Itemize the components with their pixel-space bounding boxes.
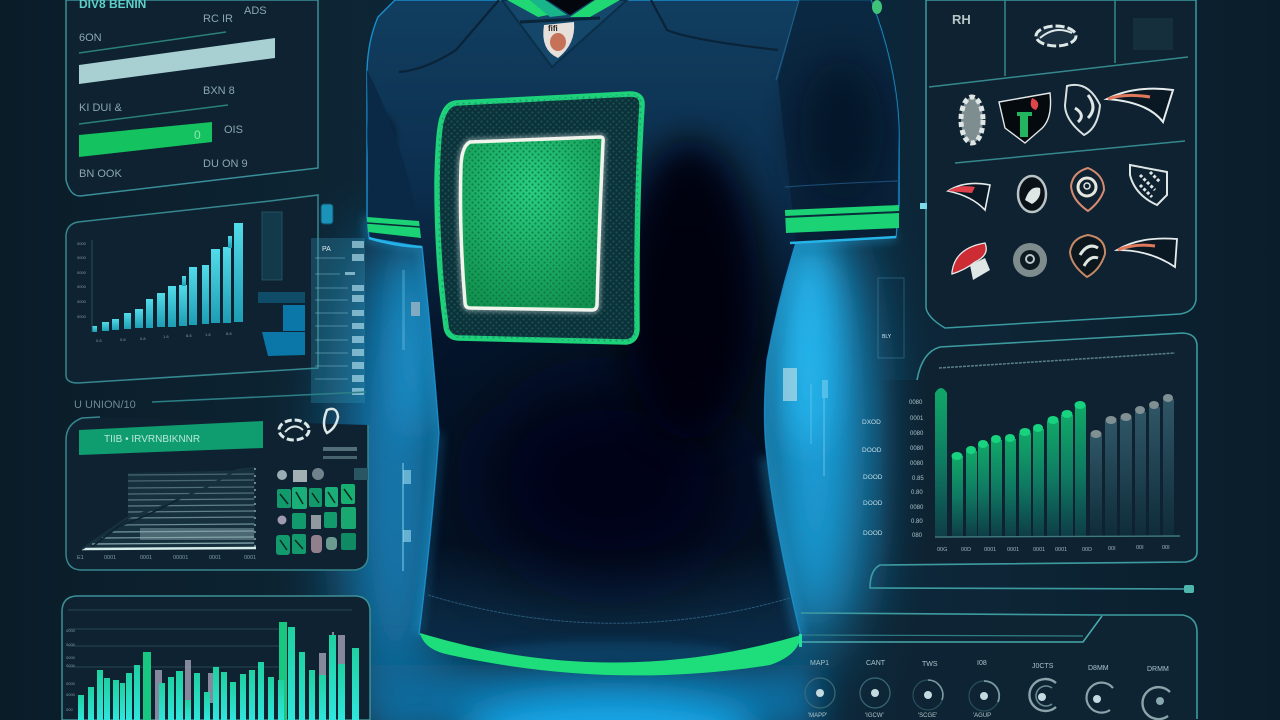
- bar labels: ADS: [244, 5, 267, 17]
- gauge labels: [810, 660, 1169, 673]
- x axis labels: 00I: [1108, 546, 1116, 552]
- chart axis labels: [77, 241, 232, 343]
- gauge labels: TWS: [922, 661, 938, 668]
- chart axis labels: 1.8: [163, 334, 169, 339]
- chart axis labels: 0000: [77, 270, 87, 275]
- left sleeve cuff: [367, 217, 422, 247]
- chart axis labels: 8.8: [226, 331, 232, 336]
- chart axis labels: 0000: [77, 299, 87, 304]
- outer labels: DOOD: [863, 500, 883, 507]
- gauge captions: 'IGCW': [865, 713, 884, 719]
- side holographic elements: BLY: [882, 334, 892, 340]
- data table: [311, 238, 365, 403]
- outer labels: DOOD: [863, 474, 883, 481]
- chart axis labels: 8.8: [186, 333, 192, 338]
- chart axis labels: 0000: [77, 314, 87, 319]
- x axis labels: 0001: [1007, 547, 1019, 553]
- y axis labels: 0001: [910, 416, 924, 422]
- y axis labels: 0080: [910, 431, 924, 437]
- hem stripe: [420, 633, 801, 675]
- x axis labels: 00D: [1082, 547, 1092, 553]
- right sleeve cuff: [785, 205, 899, 243]
- line chart axis labels: [77, 555, 256, 561]
- x axis labels: 0001: [1033, 547, 1045, 553]
- gauge labels: D8MM: [1088, 665, 1109, 672]
- outer labels: [862, 419, 883, 537]
- axis labels: 0000: [66, 692, 76, 697]
- jersey shading: [480, 380, 740, 580]
- bar labels: 6ON: [79, 32, 102, 44]
- bar labels: BXN 8: [203, 85, 235, 97]
- chart axis labels: 0.8: [120, 337, 126, 342]
- hem stitching: [428, 595, 790, 623]
- axis labels: 0000: [66, 642, 76, 647]
- panel: bottom-left multi-series bars: [62, 596, 370, 720]
- side holographic elements: [402, 270, 904, 571]
- chest patch: [437, 94, 642, 342]
- gauge centres: [816, 689, 1164, 705]
- x axis labels: 00D: [961, 547, 971, 553]
- chart axis labels: 0000: [77, 284, 87, 289]
- gauge rings: [805, 678, 1170, 719]
- bar labels: KI DUI &: [79, 102, 122, 114]
- line chart axis labels: 00001: [173, 555, 188, 561]
- line chart axis labels: 0001: [209, 555, 221, 561]
- chart title rule: [939, 353, 1175, 368]
- gauge captions: 'MAPP': [808, 713, 827, 719]
- inner glow: [460, 137, 603, 310]
- column caps: [952, 401, 1086, 460]
- axis labels: 0000: [66, 655, 76, 660]
- toggle icon: [321, 204, 333, 224]
- gauge labels: MAP1: [810, 660, 829, 667]
- axis labels: 0000: [66, 628, 76, 633]
- logo row 1: RH: [952, 12, 971, 27]
- green series: [143, 622, 287, 720]
- green columns: [935, 388, 1086, 536]
- icon grid: [276, 468, 368, 555]
- axis labels: [66, 628, 76, 712]
- slider knob: [1184, 585, 1194, 593]
- banner text: TIIB • IRVRNBIKNNR: [104, 434, 200, 445]
- y axis labels: 080: [912, 533, 923, 539]
- outer labels: DOOD: [862, 447, 882, 454]
- axis labels: 0000: [66, 663, 76, 668]
- bar labels: BN OOK: [79, 168, 122, 180]
- chart axis labels: 0.8: [96, 338, 102, 343]
- blue blocks: [258, 292, 305, 356]
- side mini table: [262, 212, 282, 280]
- y axis labels: 0080: [910, 505, 924, 511]
- jersey glow: [367, 217, 896, 636]
- line chart axis labels: 0001: [140, 555, 152, 561]
- bar labels: 0: [194, 128, 201, 142]
- line chart axis labels: 0001: [244, 555, 256, 561]
- collar: [502, 0, 627, 67]
- y axis labels: 0080: [910, 461, 924, 467]
- gauge labels: DRMM: [1147, 666, 1169, 673]
- gauge captions: 'SCGE': [918, 713, 937, 719]
- teal bars: [78, 627, 359, 720]
- x axis labels: 0001: [984, 547, 996, 553]
- chart axis labels: 0.8: [140, 336, 146, 341]
- bar labels: DU ON 9: [203, 158, 248, 170]
- chart axis labels: 1.8: [205, 332, 211, 337]
- yoke seams: [399, 0, 778, 72]
- light progress bar: [79, 38, 275, 84]
- logo row 2: [961, 85, 1173, 143]
- grey series: [155, 632, 345, 720]
- outer labels: DOOD: [863, 530, 883, 537]
- chart axis labels: 0000: [77, 255, 87, 260]
- x axis labels: 00I: [1136, 545, 1144, 551]
- team logo badges: [279, 409, 357, 459]
- y axis labels: 0080: [909, 400, 923, 406]
- logo row 4: [952, 235, 1177, 280]
- chart axis labels: 0000: [77, 241, 87, 246]
- panel: right column chart: [862, 333, 1197, 593]
- green progress bar: [79, 122, 212, 157]
- bar labels: OIS: [224, 124, 243, 136]
- gauge captions: 'AGUP: [973, 713, 991, 719]
- panel: top-left progress bars: [66, 0, 318, 196]
- axis labels: 0000: [66, 681, 76, 686]
- gauge captions: [808, 713, 991, 719]
- bar labels: [79, 5, 267, 180]
- section heading: U UNION/10: [74, 399, 136, 411]
- line chart axis labels: E1: [77, 555, 84, 561]
- logo row 3: [948, 165, 1167, 212]
- outer labels: DXOD: [862, 419, 881, 426]
- gauge labels: I08: [977, 660, 987, 667]
- grey columns: [1090, 399, 1174, 536]
- shoulder dot: [872, 0, 882, 14]
- green banner: [79, 421, 263, 455]
- bar chart: [92, 223, 243, 332]
- collar: fifi: [548, 24, 558, 33]
- jersey: [367, 0, 899, 675]
- y axis labels: 0080: [910, 446, 924, 452]
- y axis labels: [909, 400, 924, 539]
- jersey body: [367, 0, 899, 664]
- y axis labels: 0.80: [911, 519, 923, 525]
- y axis labels: 0.80: [911, 490, 923, 496]
- bar labels: RC IR: [203, 13, 233, 25]
- panel: rising bar chart: [66, 195, 333, 383]
- x axis labels: 00I: [1162, 545, 1170, 551]
- y axis labels: 0.85: [912, 476, 924, 482]
- line chart axis labels: 0001: [104, 555, 116, 561]
- x axis labels: 00G: [937, 547, 947, 553]
- gauge labels: J0CTS: [1032, 663, 1054, 670]
- connector node: [920, 203, 927, 209]
- x axis labels: [937, 545, 1170, 553]
- logo row 1: [952, 12, 1173, 50]
- panel: top-right team logos: [920, 0, 1196, 328]
- x axis labels: 0001: [1055, 547, 1067, 553]
- line chart: [82, 468, 256, 549]
- data table: PA: [322, 246, 331, 253]
- panel: bottom-right gauges: [799, 613, 1197, 720]
- axis labels: 000: [66, 707, 73, 712]
- league crest: [543, 22, 574, 58]
- mesh panel: [460, 137, 603, 310]
- panel: line chart with banner: [66, 392, 368, 570]
- gauge labels: CANT: [866, 660, 886, 667]
